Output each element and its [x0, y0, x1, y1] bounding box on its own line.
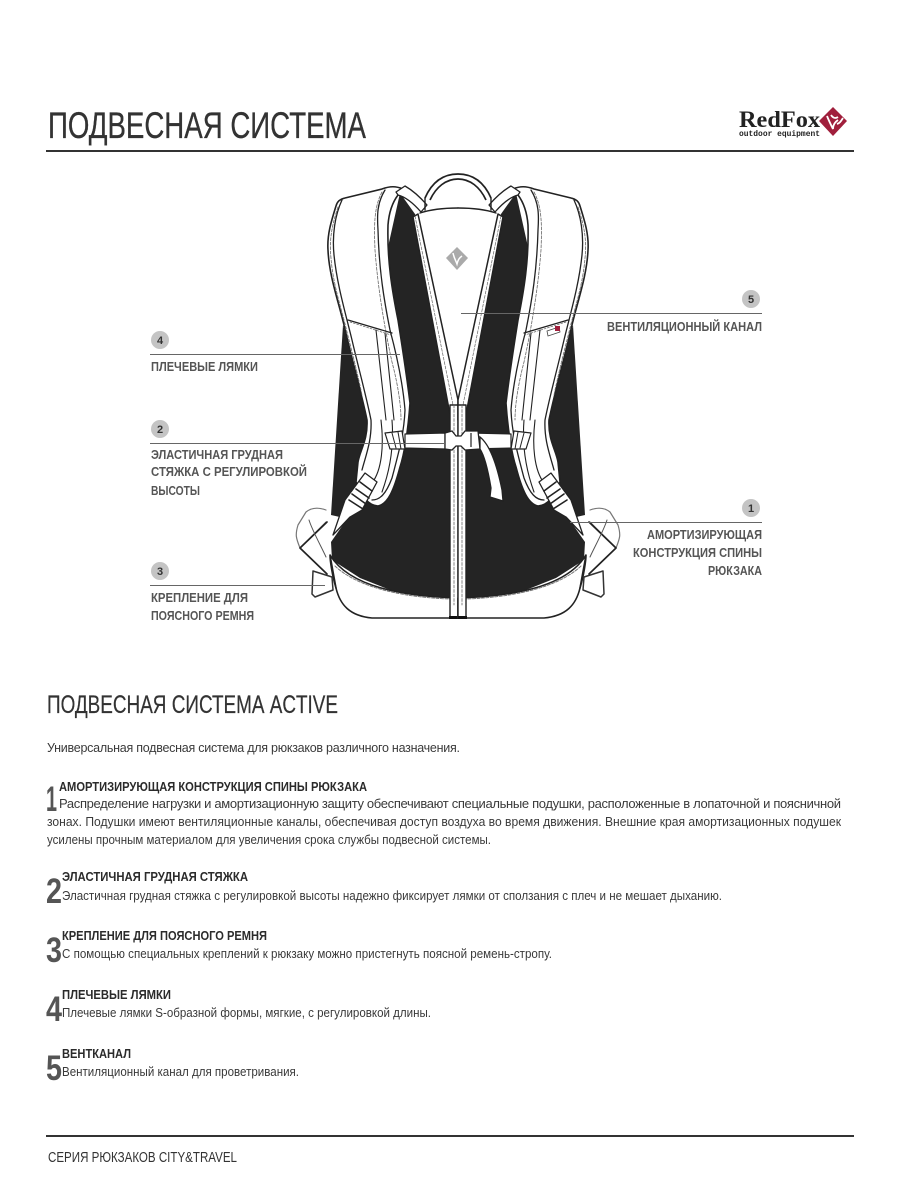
icon: carry handle: [425, 174, 491, 200]
loose strap end: [480, 437, 503, 501]
header rule: [46, 150, 854, 152]
callout 3: КРЕПЛЕНИЕ ДЛЯ: [151, 590, 248, 605]
callout 2: СТЯЖКА С РЕГУЛИРОВКОЙ: [151, 464, 307, 479]
callout 5: 5: [748, 294, 754, 306]
item 2: ЭЛАСТИЧНАЯ ГРУДНАЯ СТЯЖКА: [62, 869, 249, 884]
backpack illustration: [296, 174, 620, 619]
callout 3: ПОЯСНОГО РЕМНЯ: [151, 608, 254, 623]
item 3: КРЕПЛЕНИЕ ДЛЯ ПОЯСНОГО РЕМНЯ: [62, 928, 267, 943]
item 1: 1: [46, 780, 57, 819]
item 1: Распределение нагрузки и амортизационную защиту обеспечивают специальные подушки, расположенные в лопаточной и поясничной: [59, 796, 841, 811]
item 4: [46, 987, 431, 1029]
logo: Red Fox: outdoor equipment: [739, 130, 820, 139]
callout 4: 4: [157, 335, 164, 347]
section heading: ПОДВЕСНАЯ СИСТЕМА ACTIVE: [47, 691, 338, 719]
callout 2: 2: [157, 424, 163, 436]
item 1: [46, 779, 841, 847]
icon: center emblem: [446, 247, 468, 270]
item 3: С помощью специальных креплений к рюкзаку можно пристегнуть поясной ремень-стропу.: [62, 946, 552, 961]
item 3: 3: [46, 931, 62, 970]
callout 3: 3: [157, 566, 163, 578]
logo: Red Fox: RedFox: [739, 107, 821, 132]
item 1: АМОРТИЗИРУЮЩАЯ КОНСТРУКЦИЯ СПИНЫ РЮКЗАКА: [59, 779, 368, 794]
right half of backpack: [458, 186, 620, 619]
chest buckle: [445, 431, 480, 450]
callout 1: АМОРТИЗИРУЮЩАЯ: [647, 527, 762, 542]
item 5: [46, 1046, 299, 1088]
callout 3: [150, 562, 325, 623]
item 1: зонах. Подушки имеют вентиляционные каналы, обеспечивая доступ воздуха во время движения. Внешние края амортизационных подушек: [47, 814, 841, 829]
item 5: ВЕНТКАНАЛ: [62, 1046, 131, 1061]
intro text: Универсальная подвесная система для рюкзаков различного назначения.: [47, 741, 460, 755]
callout 1: РЮКЗАКА: [708, 563, 762, 578]
callout 2: [150, 420, 445, 498]
callout 5: ВЕНТИЛЯЦИОННЫЙ КАНАЛ: [607, 319, 762, 334]
callout 1: КОНСТРУКЦИЯ СПИНЫ: [633, 545, 762, 560]
item 5: Вентиляционный канал для проветривания.: [62, 1064, 299, 1079]
item 2: Эластичная грудная стяжка с регулировкой высоты надежно фиксирует лямки от сползания с плеч и не мешает дыханию.: [62, 888, 722, 903]
callout 4: [150, 331, 400, 374]
item 2: 2: [46, 872, 62, 911]
red label: [547, 327, 560, 336]
item 1: усилены прочным материалом для увеличения срока службы подвесной системы.: [47, 832, 491, 847]
footer text: СЕРИЯ РЮКЗАКОВ CITY&TRAVEL: [48, 1149, 237, 1166]
item 4: Плечевые лямки S-образной формы, мягкие, с регулировкой длины.: [62, 1005, 431, 1020]
callout 1: [570, 499, 762, 578]
item 3: [46, 928, 552, 970]
callout 4: ПЛЕЧЕВЫЕ ЛЯМКИ: [151, 359, 258, 374]
callout 2: ЭЛАСТИЧНАЯ ГРУДНАЯ: [151, 447, 283, 462]
left half of backpack: [296, 186, 458, 619]
callout 1: 1: [748, 503, 754, 515]
item 4: 4: [46, 990, 62, 1029]
item 2: [46, 869, 722, 911]
callout 2: ВЫСОТЫ: [151, 483, 200, 498]
title: ПОДВЕСНАЯ СИСТЕМА: [48, 105, 366, 146]
footer rule: [46, 1135, 854, 1137]
logo: Red Fox: [739, 107, 847, 139]
item 5: 5: [46, 1049, 62, 1088]
item 4: ПЛЕЧЕВЫЕ ЛЯМКИ: [62, 987, 171, 1002]
callout 5: [461, 290, 762, 334]
